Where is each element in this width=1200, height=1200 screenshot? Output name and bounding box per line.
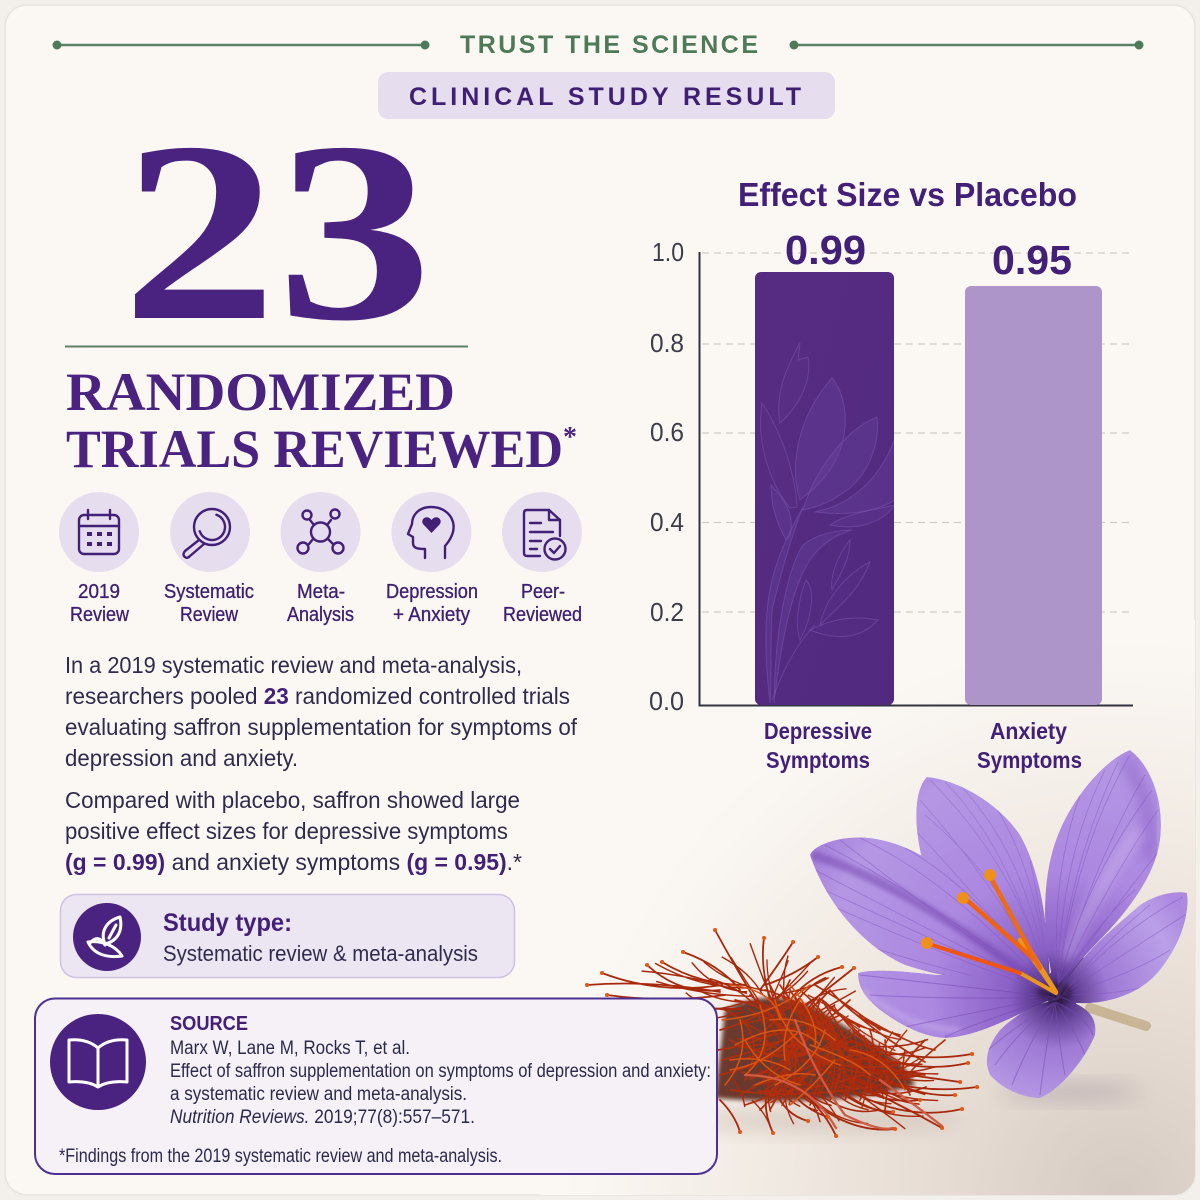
paragraph: findings: (g = 0.99) and anxiety symptoms (g = 0.95).* xyxy=(65,849,522,875)
category label: Depressive xyxy=(764,718,872,744)
panel: source: Effect of saffron supplementation on symptoms of depression and anxiety: xyxy=(170,1061,711,1082)
icon: network, meta-analysis: Meta- xyxy=(297,581,345,603)
icon: sprout xyxy=(73,903,141,971)
footnote: *Findings from the 2019 systematic review and meta-analysis. xyxy=(59,1146,502,1167)
icon: magnifier, systematic review: Systematic xyxy=(164,581,254,603)
icon: calendar, 2019 review xyxy=(59,492,139,626)
category label: Anxiety xyxy=(990,718,1067,744)
panel: study type: Systematic review & meta-analysis xyxy=(163,941,478,966)
category label: Symptoms xyxy=(766,747,870,773)
petal: far right xyxy=(1060,892,1188,1003)
paragraph: findings xyxy=(65,787,522,875)
heading: randomized trials reviewed: TRIALS REVIEWED xyxy=(66,419,581,479)
category label: Symptoms xyxy=(977,747,1082,773)
icon: magnifier, systematic review xyxy=(164,492,254,626)
icon: head with heart, depression and anxiety xyxy=(386,492,478,626)
y axis labels: 0.0 xyxy=(649,686,684,716)
panel: study type xyxy=(60,894,514,978)
icon: calendar, 2019 review: Review xyxy=(70,604,129,626)
panel: source: a systematic review and meta-analysis. xyxy=(170,1084,467,1105)
petal base xyxy=(1040,945,1095,1005)
icon: magnifier, systematic review: Review xyxy=(180,604,238,626)
panel: source: Marx W, Lane M, Rocks T, et al. xyxy=(170,1038,410,1059)
y axis labels xyxy=(649,237,684,716)
icon: open book xyxy=(50,1014,146,1110)
value label: 0.99 xyxy=(785,227,866,273)
header: trust the science xyxy=(52,31,1144,59)
badge: clinical study result: CLINICAL STUDY RESULT xyxy=(409,83,801,111)
petal: tall right xyxy=(1045,750,1161,990)
icon: document with check, peer-reviewed: Peer- xyxy=(521,581,565,603)
heading: randomized trials reviewed xyxy=(66,362,577,479)
icon: calendar, 2019 review: 2019 xyxy=(78,581,120,603)
icon: document with check, peer-reviewed: Reviewed xyxy=(503,604,582,626)
paragraph: study description: In a 2019 systematic review and meta-analysis, xyxy=(65,652,522,678)
saffron threads pile xyxy=(587,928,977,1143)
category label xyxy=(977,718,1082,773)
petal: bottom xyxy=(987,998,1095,1098)
panel: study type: Study type: xyxy=(163,909,292,937)
petal: back xyxy=(915,777,1050,985)
y axis labels: 0.4 xyxy=(650,507,684,537)
petal: lower left xyxy=(858,971,1057,1038)
y axis labels: 0.6 xyxy=(650,417,684,447)
paragraph: study description: evaluating saffron supplementation for symptoms of xyxy=(65,714,578,740)
header: trust the science: TRUST THE SCIENCE xyxy=(460,31,758,59)
chart title: Effect Size vs Placebo xyxy=(738,176,1077,213)
stem xyxy=(1090,1008,1146,1026)
paragraph: study description: researchers pooled 23 randomized controlled trials xyxy=(65,683,570,709)
bar flower watermark xyxy=(761,343,895,703)
bar: anxiety symptoms xyxy=(965,237,1102,773)
icon row xyxy=(59,492,582,626)
category label xyxy=(764,718,872,773)
paragraph: findings: positive effect sizes for depressive symptoms xyxy=(65,818,508,844)
paragraph: study description: depression and anxiety. xyxy=(65,745,298,771)
bar: depressive symptoms xyxy=(755,227,895,773)
paragraph: study description xyxy=(65,652,578,771)
saffron crocus flower xyxy=(810,750,1188,1101)
icon: network, meta-analysis xyxy=(280,492,360,626)
divider under number xyxy=(65,346,468,348)
panel: source: SOURCE xyxy=(170,1013,248,1035)
icon: head with heart, depression and anxiety: Depression xyxy=(386,581,478,603)
panel: source: Nutrition Reviews. 2019;77(8):557–571. xyxy=(170,1107,475,1128)
big number 23: 23 xyxy=(122,89,432,374)
icon: network, meta-analysis: Analysis xyxy=(287,604,354,626)
icon: head with heart, depression and anxiety: + Anxiety xyxy=(393,604,470,626)
y axis labels: 0.8 xyxy=(650,328,684,358)
heading: randomized trials reviewed: * xyxy=(563,421,577,453)
heading: randomized trials reviewed: RANDOMIZED xyxy=(66,362,455,422)
petal: big left xyxy=(810,837,1057,997)
panel: source xyxy=(35,998,717,1174)
stamens xyxy=(921,869,1073,1002)
badge: clinical study result xyxy=(378,72,835,119)
chart: effect size vs placebo xyxy=(649,176,1133,773)
y axis labels: 0.2 xyxy=(650,597,684,627)
y axis labels: 1.0 xyxy=(652,237,684,267)
value label: 0.95 xyxy=(992,237,1072,283)
paragraph: findings: Compared with placebo, saffron showed large xyxy=(65,787,520,813)
icon: document with check, peer-reviewed xyxy=(502,492,582,626)
